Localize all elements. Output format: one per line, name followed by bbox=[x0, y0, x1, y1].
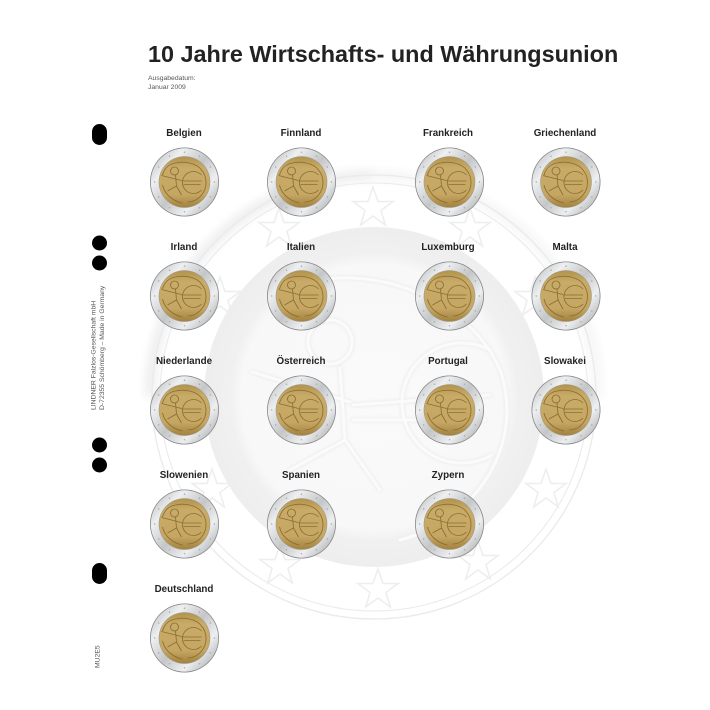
coin: Portugal: Portugal bbox=[428, 356, 468, 367]
binder holes bbox=[92, 124, 107, 584]
coin: Irland bbox=[150, 242, 219, 330]
watermark stars bbox=[192, 187, 566, 607]
issue date bbox=[148, 75, 196, 91]
coin: Zypern bbox=[415, 470, 484, 558]
watermark outer ring bbox=[150, 175, 598, 619]
coin: Portugal bbox=[415, 356, 484, 444]
coin: Luxemburg: Luxemburg bbox=[421, 242, 475, 253]
coin: Finnland bbox=[267, 128, 336, 216]
coin: Spanien bbox=[267, 470, 336, 558]
coin: Spanien: Spanien bbox=[282, 470, 320, 481]
coin: Italien bbox=[267, 242, 336, 330]
coin: Irland: Irland bbox=[171, 242, 197, 253]
watermark person and euro motif bbox=[252, 278, 507, 540]
coin: Malta bbox=[532, 242, 600, 330]
watermark: giant coin motif bbox=[150, 175, 598, 619]
coin: Frankreich: Frankreich bbox=[423, 128, 473, 139]
coin: Finnland: Finnland bbox=[281, 128, 321, 139]
coin: Griechenland: Griechenland bbox=[534, 128, 596, 139]
coin: Deutschland: Deutschland bbox=[155, 584, 213, 595]
coin: Slowenien bbox=[150, 470, 219, 558]
coin: Belgien: Belgien bbox=[166, 128, 202, 139]
manufacturer text bbox=[90, 285, 106, 410]
coin: Österreich bbox=[267, 356, 336, 444]
coin: Niederlande bbox=[150, 356, 219, 444]
coin: Slowakei bbox=[532, 356, 600, 444]
issue date: Januar 2009 bbox=[148, 84, 186, 91]
manufacturer text: D-72355 Schömberg – Made in Germany bbox=[99, 285, 106, 410]
coin: Griechenland bbox=[532, 128, 600, 216]
coin: Luxemburg bbox=[415, 242, 484, 330]
coin: Deutschland bbox=[150, 584, 219, 672]
manufacturer text: LINDNER Falzlos-Gesellschaft mbH bbox=[90, 301, 98, 410]
coin: Frankreich bbox=[415, 128, 484, 216]
coin: Slowenien: Slowenien bbox=[160, 470, 208, 481]
coin: Slowakei: Slowakei bbox=[544, 356, 586, 367]
article code: MU2E5 bbox=[94, 645, 102, 668]
title: 10 Jahre Wirtschafts- und Währungsunion bbox=[148, 41, 618, 67]
coin: Italien: Italien bbox=[287, 242, 315, 253]
coin: Österreich: Österreich bbox=[276, 356, 326, 367]
coin: Zypern: Zypern bbox=[432, 470, 464, 481]
coin: Niederlande: Niederlande bbox=[156, 356, 213, 367]
watermark inner disc bbox=[204, 227, 544, 567]
coin: Belgien bbox=[150, 128, 219, 216]
issue date: Ausgabedatum: bbox=[148, 75, 196, 82]
coin: Malta: Malta bbox=[552, 242, 578, 253]
